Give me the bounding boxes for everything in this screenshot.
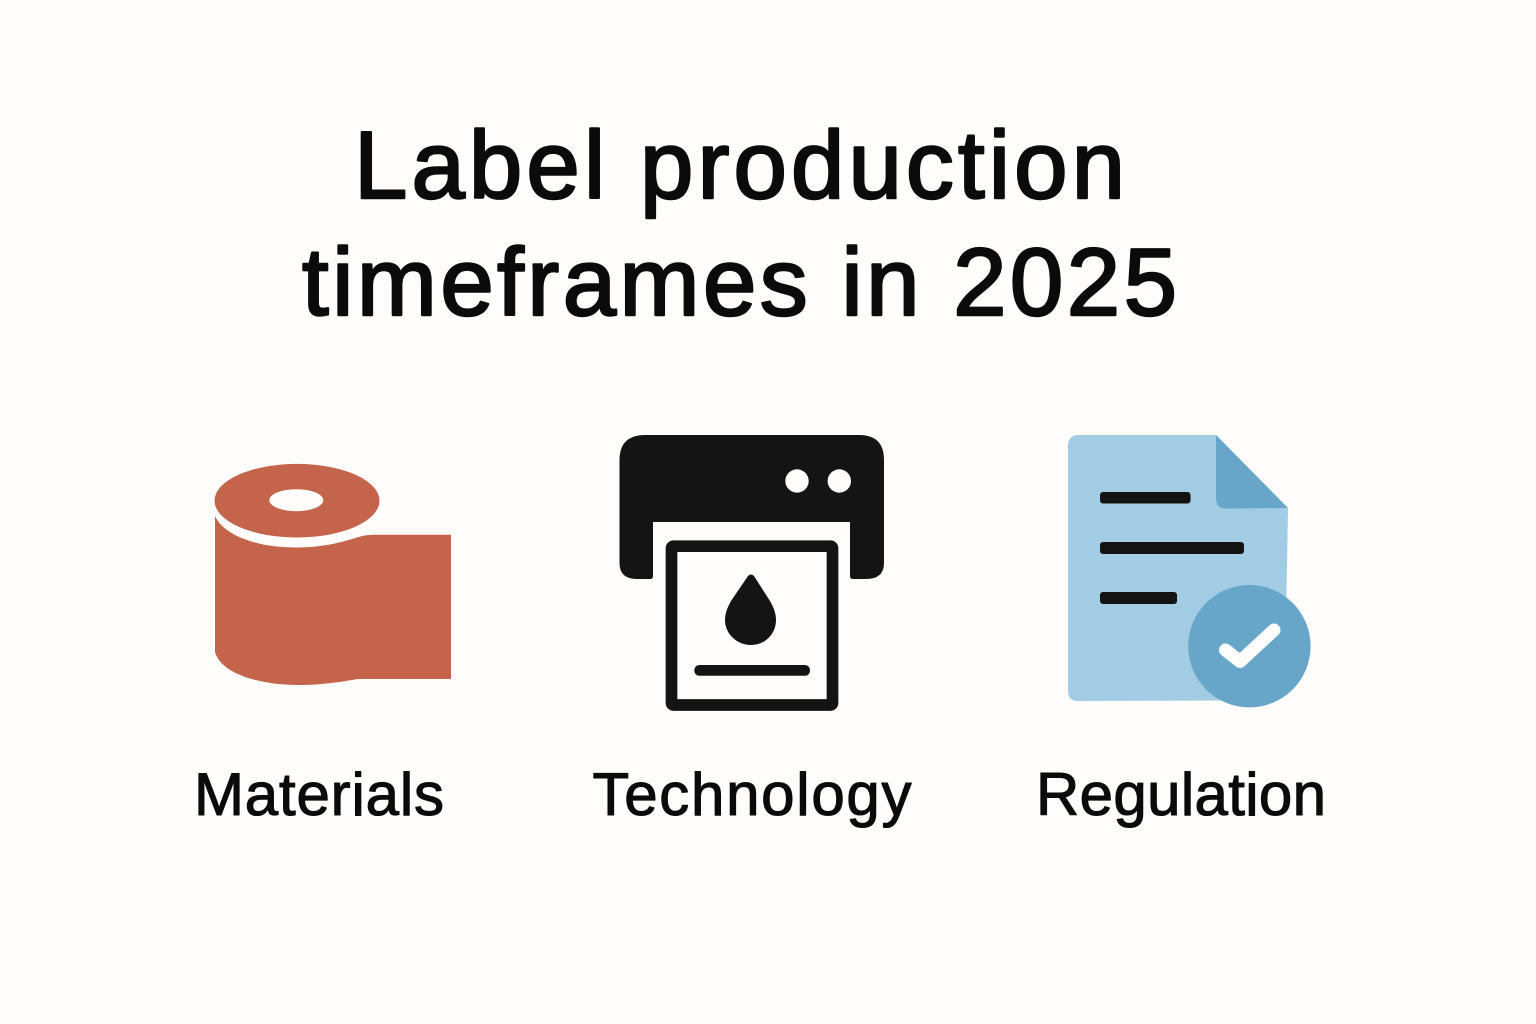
label: regulation: Regulation: [1036, 761, 1326, 828]
icon: regulation document: [1068, 435, 1311, 707]
label: materials: Materials: [194, 761, 444, 828]
icon: materials label roll: [214, 464, 451, 685]
title: [302, 112, 1177, 336]
title: timeframes in 2025: [302, 229, 1177, 336]
icon: technology printer: [620, 435, 884, 705]
title: Label production: [354, 112, 1125, 219]
label: technology: Technology: [592, 761, 912, 828]
